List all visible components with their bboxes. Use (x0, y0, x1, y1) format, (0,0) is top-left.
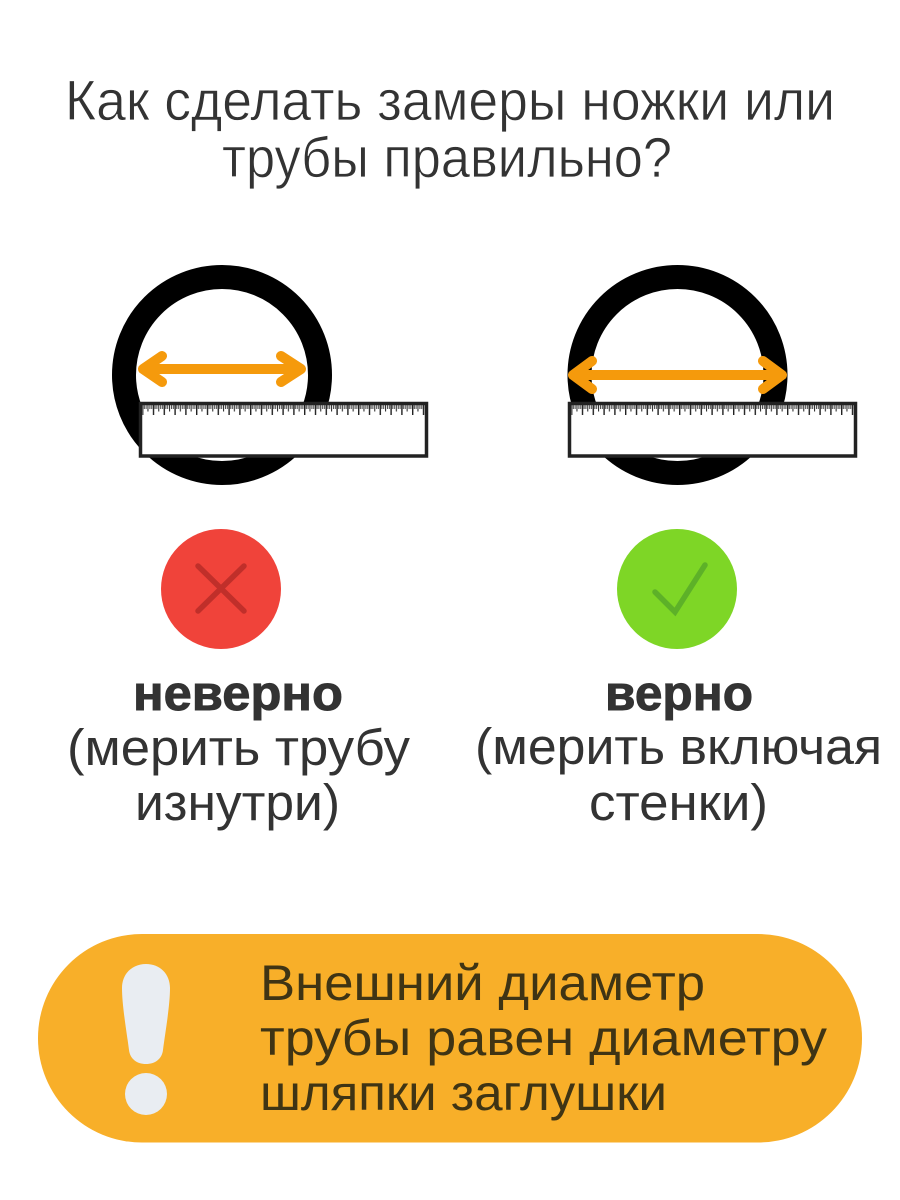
caption: wrong: (мерить трубу (67, 719, 411, 776)
diagram: wrong measurement (124, 277, 426, 473)
callout text (260, 955, 827, 1121)
caption: wrong: неверно (133, 667, 343, 721)
ruler: wrong (140, 404, 426, 456)
title: трубы правильно? (222, 126, 672, 190)
callout: note (38, 934, 862, 1142)
icon: red cross (161, 529, 281, 649)
caption: correct: стенки) (589, 774, 768, 831)
arrow: inner diameter (143, 356, 301, 382)
diagram: correct measurement (570, 277, 856, 473)
callout background (38, 934, 862, 1142)
callout text: трубы равен диаметру (260, 1010, 827, 1066)
title: Как сделать замеры ножки или (65, 69, 835, 133)
icon: exclamation mark (122, 964, 170, 1115)
caption: correct (475, 667, 882, 831)
pipe ring: wrong (124, 277, 320, 473)
ruler: correct (570, 404, 856, 456)
title (65, 69, 835, 190)
caption: wrong (67, 667, 411, 831)
icon: green check (617, 529, 737, 649)
pipe ring: correct (580, 277, 776, 473)
callout text: Внешний диаметр (260, 955, 705, 1011)
caption: correct: (мерить включая (475, 718, 882, 775)
caption: wrong: изнутри) (135, 774, 340, 831)
callout text: шляпки заглушки (260, 1065, 667, 1121)
arrow: outer diameter (573, 361, 782, 389)
caption: correct: верно (605, 667, 753, 721)
